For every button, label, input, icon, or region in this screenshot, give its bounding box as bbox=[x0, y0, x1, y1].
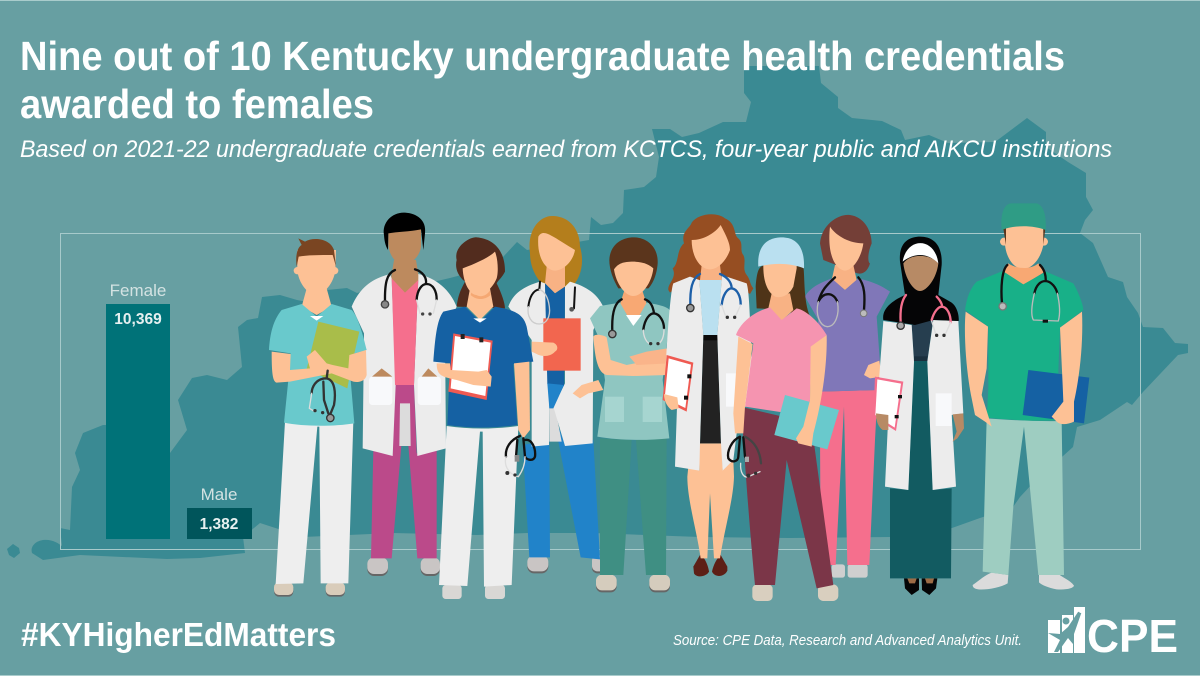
figures: centre group bbox=[590, 214, 890, 601]
logo: CPE: CPE bbox=[1087, 610, 1178, 662]
figure: nurse in pink top with light blue cap bbox=[728, 237, 839, 601]
icon: rising figure and bars bbox=[1048, 607, 1085, 653]
bar: male bbox=[187, 485, 252, 539]
figure: nurse in turquoise scrubs bbox=[269, 238, 367, 597]
map: Kentucky silhouette bbox=[7, 66, 1188, 560]
figures group: healthcare workers bbox=[269, 203, 1089, 601]
bar: female: Female bbox=[110, 281, 166, 300]
source note: Source: CPE Data, Research and Advanced Analytics Unit. bbox=[673, 632, 1022, 649]
figure: doctor with pink top bbox=[352, 213, 457, 576]
bar: male: Male bbox=[201, 485, 237, 504]
bar: female bbox=[106, 281, 170, 539]
figure: doctor with blonde hair and red folder bbox=[508, 216, 605, 573]
title: Nine out of 10 Kentucky undergraduate health credentials bbox=[20, 33, 1065, 79]
chart frame bbox=[60, 234, 1140, 550]
title bbox=[20, 33, 1065, 127]
figure: doctor with curly red hair and black skirt bbox=[663, 214, 753, 576]
figure: nurse in blue scrubs with clipboard bbox=[433, 237, 535, 599]
figure: nurse in purple top and pink trousers bbox=[805, 215, 890, 578]
figure: doctor in black hijab bbox=[873, 237, 964, 595]
figure: male nurse in green scrubs bbox=[965, 203, 1089, 589]
logo: CPE bbox=[1048, 607, 1178, 662]
bar: female: 10,369 bbox=[114, 311, 162, 328]
figures: left group bbox=[269, 213, 605, 599]
hashtag: #KYHigherEdMatters bbox=[21, 616, 336, 653]
figures: right group bbox=[873, 203, 1089, 595]
bar chart: credentials by gender bbox=[106, 281, 252, 539]
figure: nurse with brown bob bbox=[590, 237, 671, 592]
title: awarded to females bbox=[20, 81, 374, 127]
bar: male: 1,382 bbox=[200, 516, 238, 533]
subtitle: Based on 2021-22 undergraduate credentials earned from KCTCS, four-year public and AIKCU institutions bbox=[20, 136, 1112, 163]
